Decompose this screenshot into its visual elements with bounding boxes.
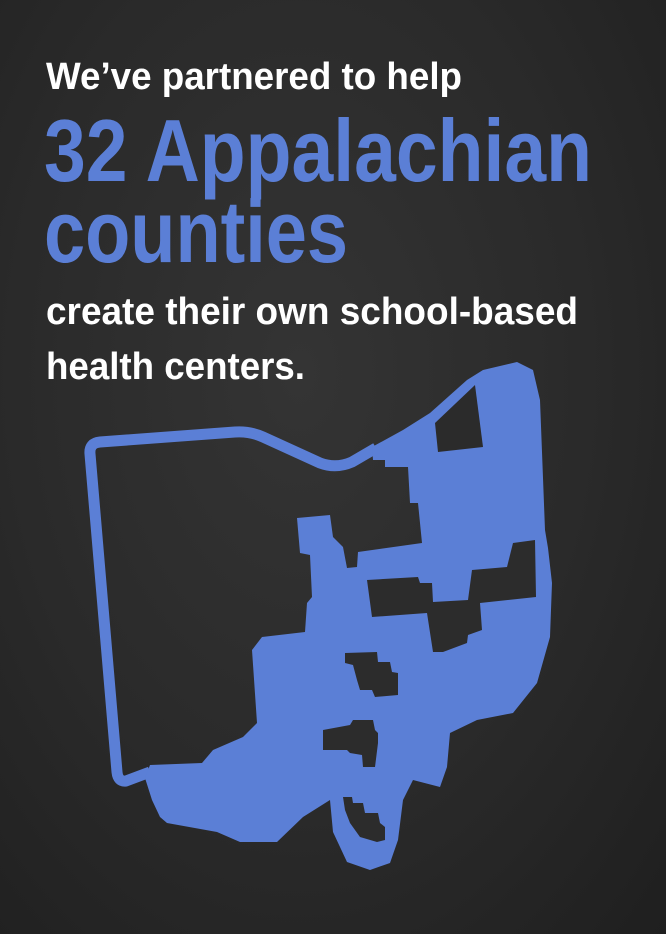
- county gap east: [367, 540, 536, 652]
- headline text: [44, 56, 592, 388]
- counties line: counties: [44, 182, 348, 281]
- intro line: We’ve partnered to help: [46, 56, 462, 98]
- state outline: [90, 432, 376, 781]
- county gap south-central: [323, 720, 378, 767]
- appalachian region fill: [145, 362, 552, 870]
- county gap NE: [435, 385, 483, 452]
- subtitle line 1: create their own school-based: [46, 291, 578, 333]
- county gap central: [345, 652, 398, 697]
- county gap south tip: [343, 797, 385, 842]
- subtitle line 2: health centers.: [46, 346, 305, 388]
- map: Ohio with Appalachian counties: [90, 362, 552, 870]
